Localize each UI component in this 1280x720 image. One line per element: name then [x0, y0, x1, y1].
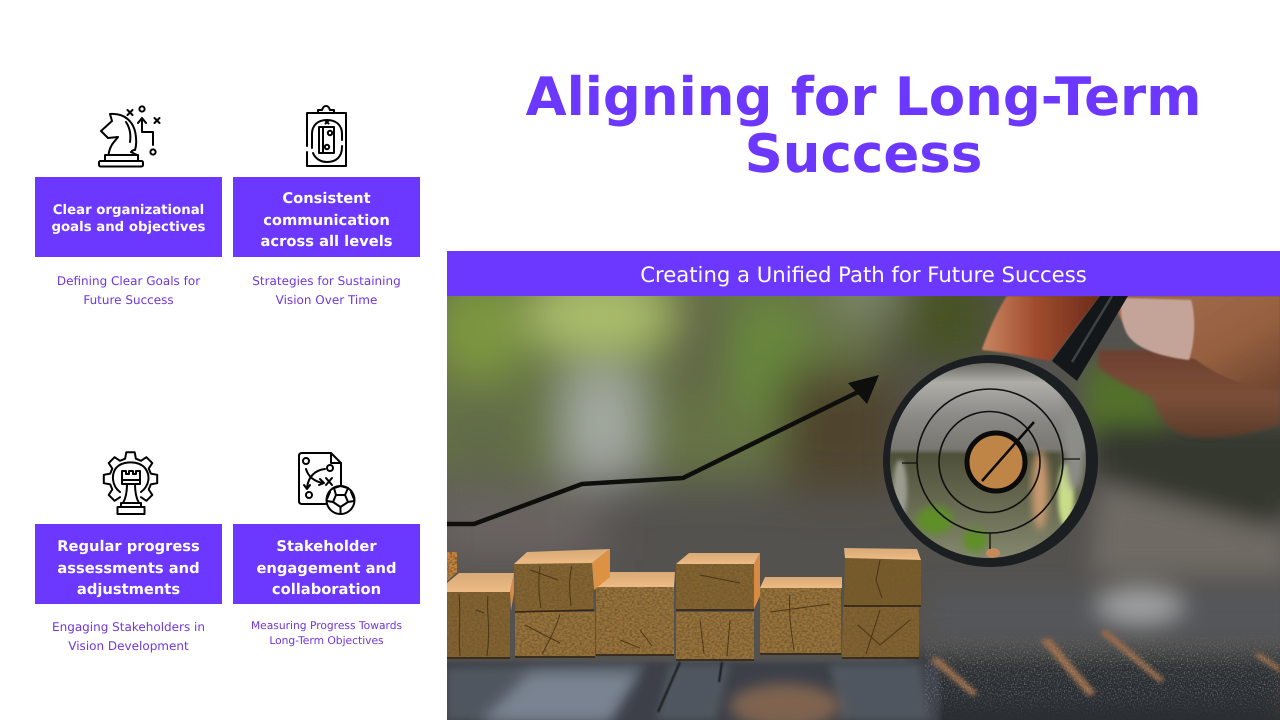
icon: clipboard with track — [306, 105, 347, 167]
text: goals description: Defining Clear Goals for — [57, 274, 200, 288]
heading: consistent communication: Consistent — [282, 190, 371, 207]
panel: stakeholders — [233, 452, 420, 647]
heading: stakeholder engagement: collaboration — [272, 581, 381, 598]
magnifying glass — [883, 355, 1098, 567]
heading: consistent communication: communication — [263, 212, 390, 228]
panel: progress — [35, 451, 222, 653]
heading: regular progress: Regular progress — [57, 538, 200, 555]
text: stakeholder description — [251, 619, 402, 647]
hand and handle — [982, 296, 1280, 437]
title: Aligning for Long-Term — [526, 67, 1201, 128]
heading: clear organizational goals: goals and objectives — [52, 220, 205, 235]
panel: communication — [233, 105, 420, 307]
text: communication description — [252, 274, 401, 307]
heading: consistent communication — [233, 177, 420, 257]
text: communication description: Strategies for Sustaining — [252, 274, 401, 288]
icon: chess knight with play diagram — [98, 105, 160, 168]
icon: tactics sheet and soccer ball — [298, 452, 356, 515]
table planks — [430, 629, 1280, 720]
heading: clear organizational goals — [35, 177, 222, 257]
text: goals description — [57, 274, 200, 307]
text: progress description — [52, 620, 205, 653]
heading: clear organizational goals: Clear organizational — [53, 203, 204, 218]
heading: consistent communication: across all levels — [261, 233, 392, 250]
chart arrow — [447, 375, 879, 524]
heading: regular progress: adjustments — [77, 581, 180, 598]
heading: regular progress: assessments and — [57, 560, 200, 576]
subtitle banner: Creating a Unified Path for Future Success — [640, 262, 1087, 287]
text: stakeholder description: Measuring Progress Towards — [251, 619, 402, 632]
text: communication description: Vision Over Time — [276, 293, 377, 307]
heading: stakeholder engagement — [233, 524, 420, 604]
text: stakeholder description: Long-Term Objectives — [269, 634, 384, 647]
text: progress description: Engaging Stakeholders in — [52, 620, 205, 634]
text: progress description: Vision Development — [68, 639, 189, 653]
title — [526, 67, 1201, 185]
wooden blocks — [447, 548, 921, 660]
photo: magnifier over wooden blocks and rising arrow — [447, 296, 1280, 720]
subtitle banner — [447, 251, 1280, 296]
background blur — [447, 296, 1280, 720]
title: Success — [745, 124, 982, 185]
panel: goals — [35, 105, 222, 307]
heading: stakeholder engagement: engagement and — [256, 560, 397, 576]
text: goals description: Future Success — [83, 293, 174, 307]
icon: rook inside gear — [102, 451, 158, 515]
heading: regular progress — [35, 524, 222, 604]
heading: stakeholder engagement: Stakeholder — [276, 538, 377, 555]
